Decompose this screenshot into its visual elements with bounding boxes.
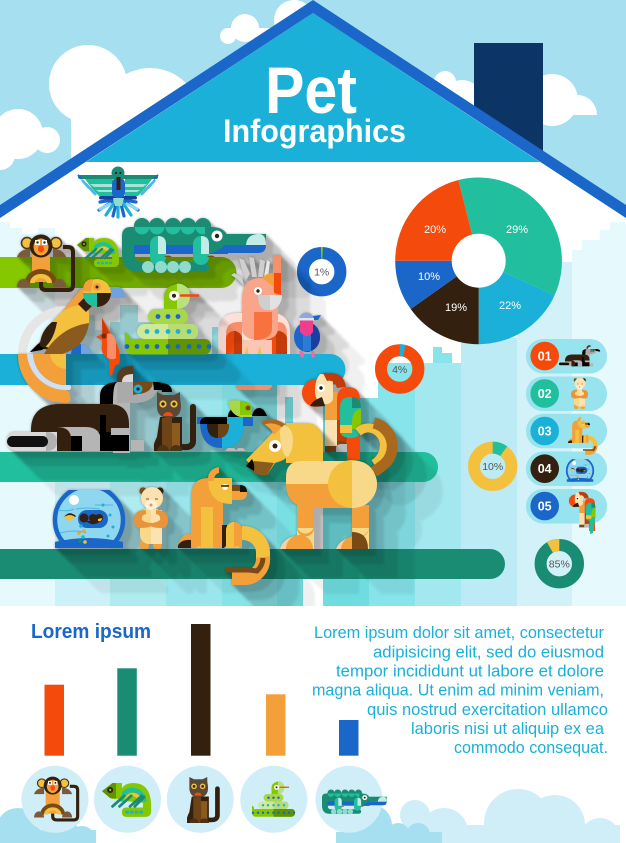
- shelf: green: [0, 257, 236, 288]
- icon: monkey: [17, 234, 73, 290]
- icon: toucan tail: [18, 354, 71, 403]
- legend: 05: [538, 500, 552, 514]
- paragraph: adipisicing elit, sed do eiusmod: [373, 642, 604, 661]
- icon: toucan: [30, 279, 125, 354]
- donut 85%: 85%: [549, 558, 570, 570]
- shelf: teal: [0, 452, 438, 482]
- donut 10%: 10%: [482, 461, 503, 473]
- shadows: bottom row: [55, 419, 392, 578]
- gable: [86, 13, 540, 162]
- icon: cardinal: [96, 318, 120, 376]
- main pie chart: 29%: [506, 224, 528, 236]
- paragraph: [312, 623, 608, 757]
- donut 4%: [381, 350, 418, 388]
- icon: fish bowl: [55, 486, 123, 554]
- icon: lorikeet: [294, 312, 321, 358]
- icon: snake: [125, 284, 211, 354]
- paragraph: Lorem ipsum dolor sit amet, consectetur: [314, 623, 604, 642]
- paragraph: quis nostrud exercitation ullamco: [367, 700, 608, 719]
- main pie chart: 20%: [424, 224, 446, 236]
- legend: [526, 339, 607, 534]
- icon: cockatoo: [219, 255, 290, 390]
- bottom icon circles: [22, 766, 387, 833]
- roof: [0, 0, 626, 218]
- tail ring behind toucan: [18, 306, 66, 354]
- icon: orange cat: [178, 467, 263, 578]
- donut 1%: 1%: [314, 266, 329, 278]
- legend: 01: [538, 350, 552, 364]
- main pie chart: 22%: [499, 300, 521, 312]
- shelf: dark teal: [0, 549, 505, 579]
- paragraph: laboris nisi ut aliquip ex ea: [411, 719, 605, 738]
- legend: 02: [538, 387, 552, 401]
- icon: lemur: [7, 366, 172, 453]
- icon: black cat: [154, 392, 193, 451]
- icon: hamster: [134, 487, 168, 549]
- donut 85%: [534, 538, 585, 589]
- shadows: toucan, cardinal, snake: [18, 279, 211, 403]
- donut 10%: [474, 448, 511, 485]
- icon: blue bird: [197, 400, 267, 451]
- bar chart: [44, 624, 358, 756]
- icon: parrot: [302, 373, 361, 460]
- main pie chart: [395, 178, 562, 344]
- legend: 03: [538, 424, 552, 438]
- shadows: cockatoo and lorikeet: [219, 255, 321, 390]
- icon: crocodile: [122, 218, 266, 273]
- icon: hummingbird: [78, 166, 158, 217]
- shadows: top row: [17, 218, 266, 290]
- donut 1%: [302, 252, 341, 291]
- title: Pet: [265, 53, 357, 127]
- chimney: [474, 43, 543, 160]
- heading: Lorem ipsum: Lorem ipsum: [31, 621, 151, 643]
- legend: 04: [538, 462, 552, 476]
- city skyline background: [0, 222, 626, 606]
- clouds behind the house: [0, 0, 597, 200]
- title: [223, 53, 406, 149]
- title: Infographics: [223, 113, 406, 149]
- icon: chameleon: [77, 238, 119, 267]
- shelf: blue: [0, 354, 345, 385]
- bottom clouds: [0, 789, 620, 843]
- main pie chart: 19%: [445, 302, 467, 314]
- icon: dog: [246, 419, 392, 549]
- paragraph: magna aliqua. Ut enim ad minim veniam,: [312, 681, 604, 700]
- main pie chart: 10%: [418, 271, 440, 283]
- donut 4%: 4%: [392, 364, 407, 376]
- paragraph: tempor incididunt ut labore et dolore: [336, 662, 604, 680]
- paragraph: commodo consequat.: [454, 738, 608, 757]
- shadows: third row: [7, 366, 361, 460]
